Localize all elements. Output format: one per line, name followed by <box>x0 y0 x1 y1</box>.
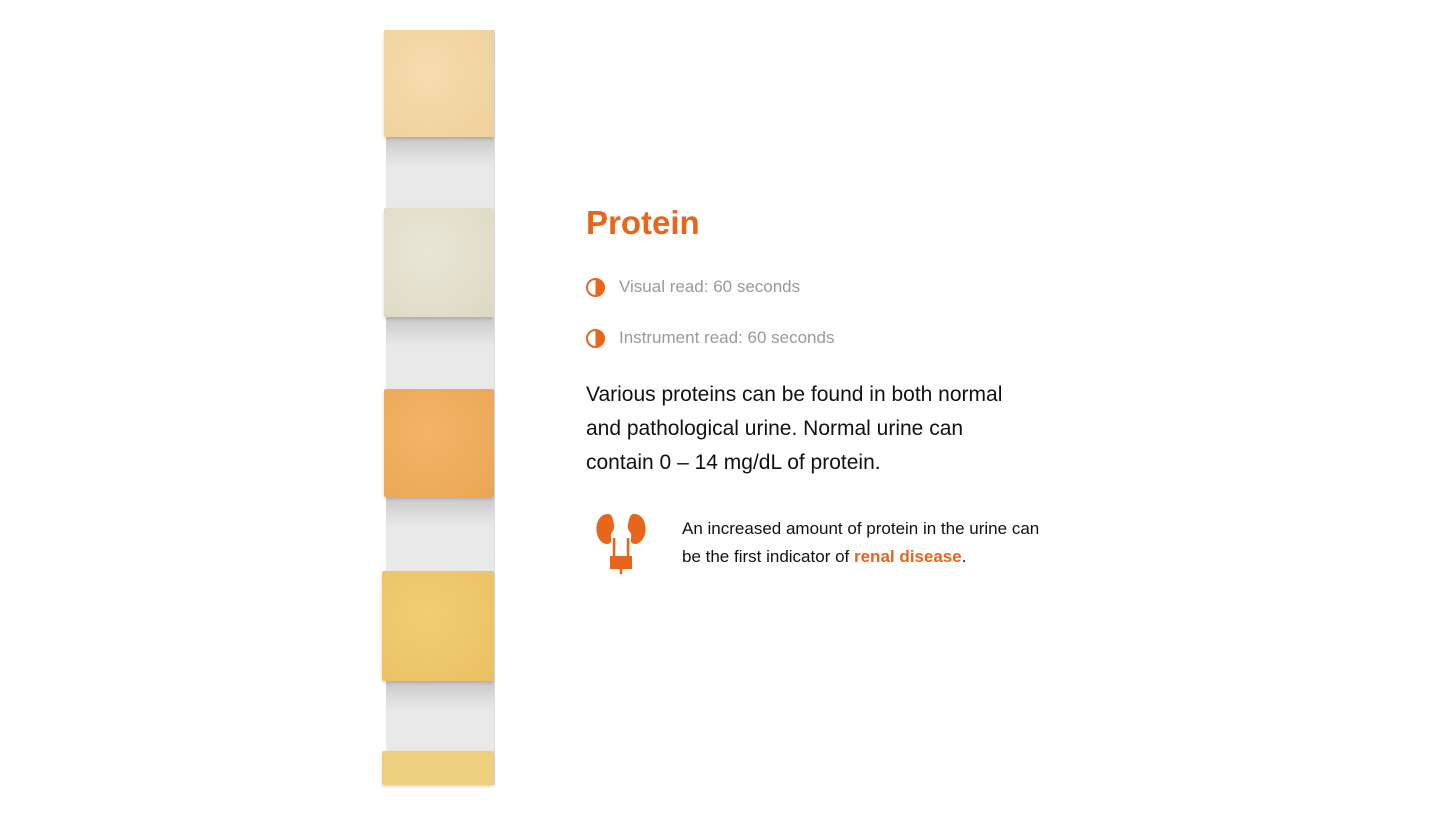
title: Protein <box>586 204 700 241</box>
pad 2 <box>384 208 493 317</box>
icon: kidneys <box>596 514 646 574</box>
pad 4 <box>382 571 494 681</box>
callout text: An increased amount of protein in the urine can be the first indicator of renal disease. <box>682 519 1039 566</box>
pad 1 <box>384 30 494 137</box>
description: Various proteins can be found in both normal and pathological urine. Normal urine can contain 0 – 14 mg/dL of protein. <box>586 383 1002 474</box>
test strip <box>381 30 495 788</box>
pad 5 <box>382 751 494 785</box>
strip backing <box>386 30 495 785</box>
visual read: Visual read: 60 seconds <box>619 277 800 296</box>
instrument read: Instrument read: 60 seconds <box>619 328 834 347</box>
pad 3 <box>384 389 494 497</box>
